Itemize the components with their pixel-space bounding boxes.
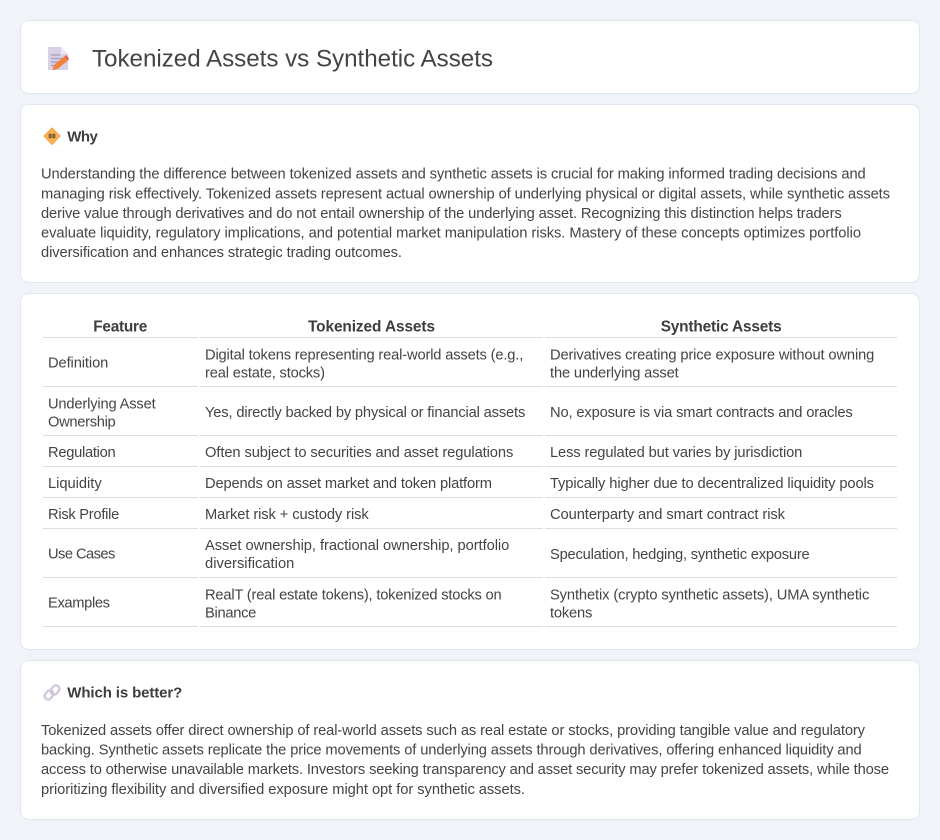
text block: which is better paragraph: prioritizing flexibility and diversified exposure might opt for synthetic assets. (41, 782, 525, 798)
row: use cases: Asset ownership, fractional ownership, portfolio (205, 538, 509, 554)
row: examples: Synthetix (crypto synthetic assets), UMA synthetic (550, 587, 869, 603)
text block: why paragraph (41, 167, 890, 261)
row: examples: tokens (550, 605, 592, 621)
text block: which is better paragraph (41, 723, 889, 798)
row: liquidity: Typically higher due to decentralized liquidity pools (550, 476, 874, 492)
table header row (93, 318, 782, 336)
panel: comparison table (20, 294, 920, 650)
row: examples (48, 587, 869, 621)
row: definition: the underlying asset (550, 365, 679, 381)
row: risk profile: Counterparty and smart contract risk (550, 507, 786, 523)
row: definition: Digital tokens representing real-world assets (e.g., (205, 347, 523, 363)
text block: which is better paragraph: backing. Synthetic assets replicate the price movements of underlying assets through derivatives, offering enhanced liquidity and (41, 743, 862, 759)
table header row: Feature (93, 318, 148, 336)
text block: which is better paragraph: Tokenized assets offer direct ownership of real-world assets such as real estate or stocks, providing tangible value and regulatory (41, 723, 866, 739)
row: use cases: diversification (205, 556, 294, 572)
row: regulation: Often subject to securities and asset regulations (205, 445, 513, 461)
text block: why paragraph: Understanding the difference between tokenized assets and synthetic assets is crucial for making informed trading decisions and (41, 167, 866, 183)
row: examples: RealT (real estate tokens), tokenized stocks on (205, 587, 502, 603)
row: use cases (48, 538, 810, 572)
row: underlying asset ownership: Underlying Asset (48, 396, 156, 412)
text block: which is better paragraph: access to otherwise unavailable markets. Investors seeking transparency and asset security may prefer tokenized assets, while those (41, 762, 889, 778)
row: liquidity: Liquidity (48, 476, 102, 492)
row: definition: real estate, stocks) (205, 365, 325, 381)
icon: warning diamond (44, 128, 60, 144)
text block: why paragraph: managing risk effectively. Tokenized assets represent actual ownership of underlying physical or digital assets, while synthetic assets (41, 186, 890, 202)
row: definition: Definition (48, 356, 108, 372)
row: liquidity (48, 476, 874, 492)
row: risk profile: Market risk + custody risk (205, 507, 369, 523)
icon: chain link (43, 684, 61, 701)
title: Tokenized Assets vs Synthetic Assets (92, 46, 493, 72)
row: underlying asset ownership (48, 396, 853, 430)
row: definition (48, 347, 874, 381)
panel: header (20, 20, 920, 94)
heading: why: Why (67, 129, 98, 146)
row: risk profile: Risk Profile (48, 507, 119, 523)
panel: which is better (20, 660, 920, 820)
row: use cases: Speculation, hedging, synthetic exposure (550, 547, 810, 563)
text block: why paragraph: diversification and enhances strategic trading outcomes. (41, 245, 402, 261)
row: examples: Binance (205, 605, 256, 621)
row: regulation: Less regulated but varies by jurisdiction (550, 445, 802, 461)
panel: why (20, 104, 920, 282)
table header row: Tokenized Assets (308, 318, 435, 336)
row: definition: Derivatives creating price exposure without owning (550, 347, 874, 363)
row: regulation (48, 445, 802, 461)
table header row: Synthetic Assets (661, 318, 782, 336)
row: liquidity: Depends on asset market and token platform (205, 476, 492, 492)
row: underlying asset ownership: Yes, directly backed by physical or financial assets (205, 405, 525, 421)
text block: why paragraph: derive value through derivatives and do not entail ownership of the underlying asset. Recognizing this distinction helps traders (41, 206, 842, 222)
row: use cases: Use Cases (48, 547, 115, 563)
row: examples: Examples (48, 596, 110, 612)
text block: why paragraph: evaluate liquidity, regulatory implications, and potential market manipulation risks. Mastery of these concepts optimizes portfolio (41, 226, 861, 242)
row: regulation: Regulation (48, 445, 116, 461)
row: underlying asset ownership: No, exposure is via smart contracts and oracles (550, 405, 853, 421)
icon: document with pencil (48, 47, 69, 70)
heading: which is better: Which is better? (67, 685, 182, 702)
row: risk profile (48, 507, 786, 523)
row: underlying asset ownership: Ownership (48, 414, 116, 430)
